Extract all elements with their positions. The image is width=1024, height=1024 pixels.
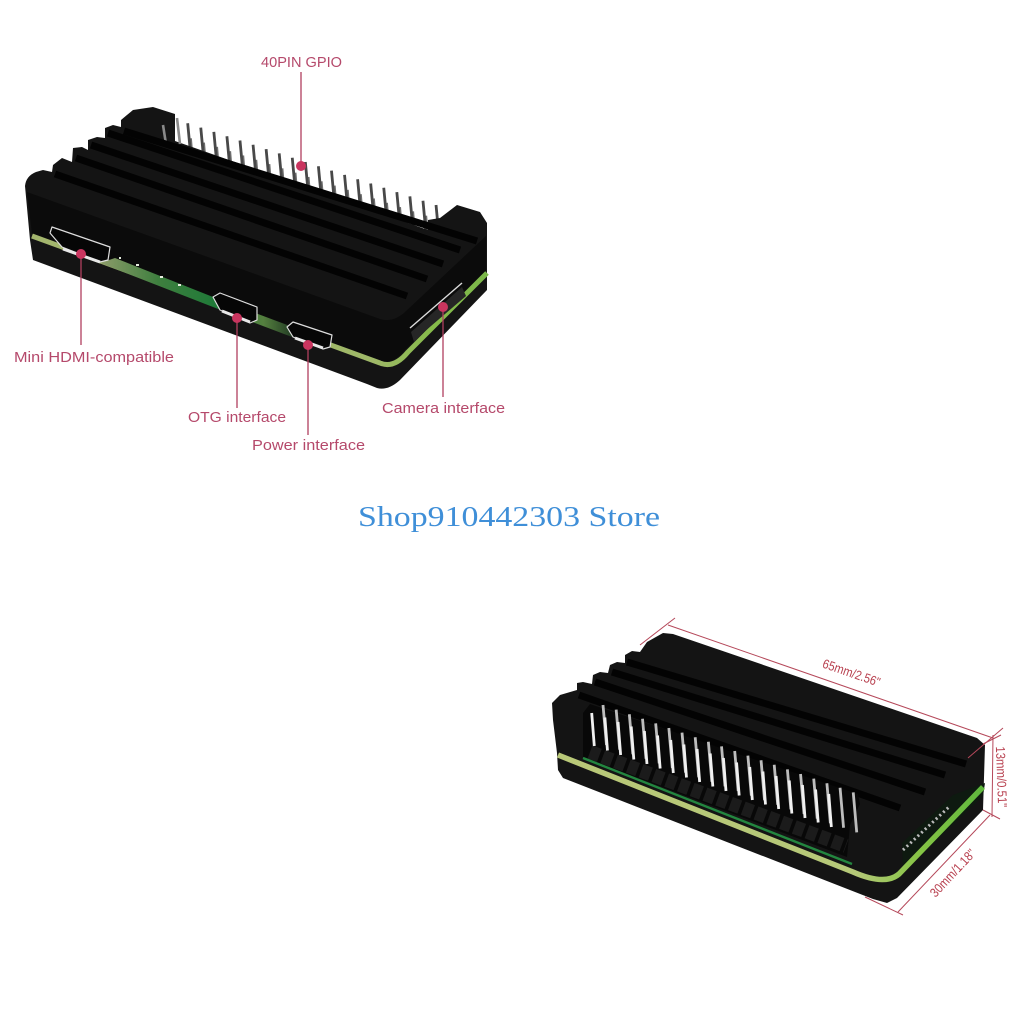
watermark: store name: Shop910442303 Store	[358, 501, 660, 533]
front face shade	[27, 192, 486, 362]
dimension: 65mm length: 65mm/2.56"	[821, 656, 883, 690]
power port	[287, 322, 332, 349]
end board with connector	[902, 783, 985, 872]
camera opening	[411, 287, 466, 342]
callout: Power interface	[252, 340, 365, 454]
green board band	[558, 755, 983, 880]
callout: Camera interface: Camera interface	[382, 400, 505, 417]
callout: Mini HDMI-compatible: Mini HDMI-compatible	[14, 349, 174, 366]
dimension: 65mm length	[640, 618, 1003, 758]
callout: Mini HDMI-compatible	[14, 249, 174, 366]
pin headers	[590, 752, 846, 846]
camera slot	[410, 283, 462, 328]
case body	[25, 107, 487, 389]
product photo: top case with ports	[25, 107, 487, 389]
dimension: 13mm height: 13mm/0.51"	[993, 746, 1010, 808]
callout: 40PIN GPIO	[261, 54, 342, 171]
front row pins	[592, 713, 831, 827]
mini HDMI port	[50, 227, 110, 262]
exposed circuit board	[100, 258, 292, 337]
pins in front of corner block	[163, 118, 180, 144]
case body	[552, 633, 985, 903]
callout: Camera interface	[382, 302, 505, 417]
GPIO pins	[188, 123, 441, 244]
pin recess	[583, 704, 860, 857]
OTG port	[213, 293, 257, 323]
dimension: 30mm width	[865, 815, 990, 915]
green board band	[32, 236, 487, 365]
callout: OTG interface: OTG interface	[188, 409, 286, 426]
dimension: 30mm width: 30mm/1.18"	[927, 846, 979, 900]
display connector	[903, 806, 950, 850]
callout: OTG interface	[188, 313, 286, 426]
heat-sink grooves	[579, 662, 966, 808]
product photo: case with dimensions	[552, 618, 1010, 915]
callout: 40PIN GPIO: 40PIN GPIO	[261, 54, 342, 71]
rear row pins	[603, 705, 857, 832]
callout: Power interface: Power interface	[252, 437, 365, 454]
heat-sink grooves	[55, 131, 477, 296]
dimension: 13mm height	[983, 735, 1010, 819]
board components	[119, 257, 181, 286]
circuit board surface	[583, 758, 852, 864]
